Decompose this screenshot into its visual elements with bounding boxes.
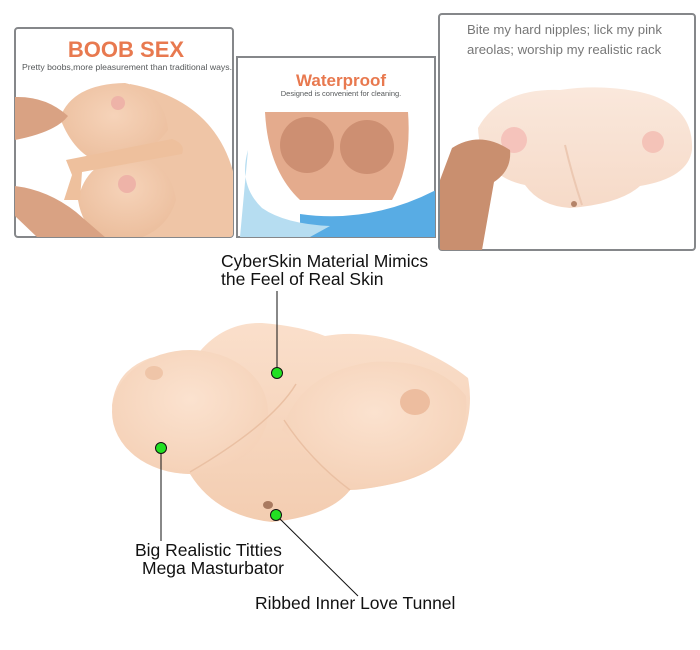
panel shape: centre bar	[64, 139, 183, 200]
left opening	[280, 117, 334, 173]
product body	[478, 87, 692, 208]
hand	[440, 139, 510, 250]
callout: inner tunnel	[255, 510, 455, 613]
main product	[112, 323, 470, 522]
main product: right form	[282, 362, 466, 489]
product base	[265, 112, 409, 200]
panel shape: left hand lower	[15, 186, 106, 238]
text: caption: areolas; worship my realistic rack	[467, 42, 662, 57]
main product: left areola	[145, 366, 163, 380]
panel shape: lower form	[78, 166, 150, 237]
heading: boob sex: BOOB SEX	[68, 37, 184, 62]
callout: big realistic	[135, 442, 284, 578]
panel: waterproof	[237, 57, 436, 237]
callout: cyberskin: the Feel of Real Skin	[221, 269, 383, 289]
panel shape: left hand upper	[15, 97, 68, 140]
callout: cyberskin	[221, 251, 428, 378]
main product: left form	[112, 350, 268, 474]
text: caption: Bite my hard nipples; lick my pink	[467, 22, 662, 37]
right opening	[340, 120, 394, 174]
text: caption	[467, 22, 662, 57]
main product: right areola	[400, 389, 430, 415]
water	[300, 190, 436, 237]
panel shape: right mass	[130, 84, 233, 237]
panel: boob sex	[15, 28, 234, 238]
callout: big realistic: Mega Masturbator	[142, 558, 284, 578]
callout: cyberskin: CyberSkin Material Mimics	[221, 251, 428, 271]
text: cleaning note: Designed is convenient for cleaning.	[281, 89, 401, 98]
panel shape: upper form	[62, 83, 140, 156]
main product: opening	[263, 501, 273, 509]
callout: big realistic: Big Realistic Titties	[135, 540, 282, 560]
callout: inner tunnel: Ribbed Inner Love Tunnel	[255, 593, 455, 613]
panel: realistic rack	[439, 14, 695, 250]
text: subheading: Pretty boobs,more pleasurement than traditional ways.	[22, 62, 232, 72]
main product: centre fold	[190, 384, 350, 490]
heading: waterproof: Waterproof	[296, 71, 386, 90]
